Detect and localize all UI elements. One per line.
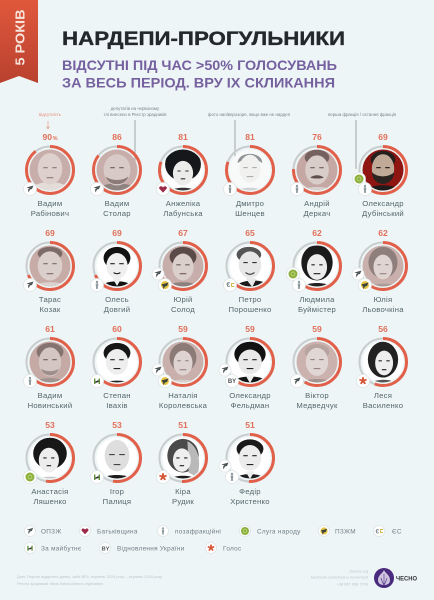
deputy: Ігор Палиця: 53 (112, 420, 122, 430)
legend: Слуга народу: Слуга народу (257, 528, 301, 536)
deputy: Вадим Рабінович: 90% (43, 132, 58, 142)
ribbon: 5 років: 5 РОКІВ (14, 10, 28, 66)
legend: За майбутнє: За майбутнє (41, 544, 82, 552)
deputy: Степан Івахів: Івахів (106, 401, 128, 410)
annotation: red background: тлі внесено в Реєстр зрадників (104, 112, 167, 117)
deputy: Наталія Королевська (152, 324, 208, 410)
deputy: Людмила Буймістер (286, 228, 341, 314)
deputy: Леся Василенко (356, 324, 407, 410)
deputy: Олександр Дубінський (352, 132, 407, 218)
contacts: chesno.org (349, 568, 368, 574)
legend: Відновлення України: Відновлення України (117, 544, 185, 552)
legend: Батьківщина: Батьківщина (97, 528, 138, 536)
deputy: Андрій Деркач (290, 132, 341, 218)
deputy: Вадим Столар: Столар (103, 209, 131, 218)
deputy: Петро Порошенко (224, 228, 274, 314)
title: НАРДЕПИ-ПРОГУЛЬНИКИ (62, 29, 345, 50)
deputy: Леся Василенко: Василенко (363, 401, 403, 410)
annotation: factions (328, 112, 397, 169)
deputy: Вадим Рабінович (24, 132, 74, 218)
deputy: Вадим Рабінович: Вадим (38, 199, 62, 208)
deputy: Олесь Довгий: 69 (112, 228, 122, 238)
deputy: Леся Василенко: 56 (378, 324, 388, 334)
deputy: Олександр Фельдман: BY (228, 379, 236, 385)
deputy: Дмитро Шенцев: Шенцев (235, 209, 265, 218)
deputy: Вадим Новинський: Вадим (38, 391, 62, 400)
annotation: factions: перша фракція / остання фракція (328, 112, 397, 117)
deputy: Федір Христенко (219, 420, 274, 506)
legend: Відновлення України: BY (101, 546, 110, 552)
legend: ПЗЖМ: ПЗЖМ (335, 528, 356, 536)
deputy: Вадим Новинський: Новинський (28, 401, 72, 410)
deputy: Людмила Буймістер: 62 (312, 228, 322, 238)
deputy: Федір Христенко: Федір (239, 487, 261, 496)
deputy: Дмитро Шенцев: Дмитро (236, 199, 264, 208)
deputy: Юрій Солод: Юрій (173, 295, 193, 304)
deputy: Олександр Фельдман (219, 324, 274, 410)
deputy: Юлія Льовочкіна: Юлія (374, 295, 392, 304)
deputy: Анастасія Ляшенко: 53 (45, 420, 55, 430)
deputy: Кіра Рудик: Рудик (172, 497, 194, 506)
deputy: Анжеліка Лабунська: Анжеліка (166, 199, 201, 208)
deputy: Вадим Рабінович: Рабінович (31, 209, 69, 218)
deputy: Юлія Льовочкіна: Льовочкіна (362, 305, 404, 314)
legend: позафракційні: позафракційні (175, 528, 221, 536)
deputy: Юрій Солод (152, 228, 207, 314)
subtitle: ВІДСУТНІ ПІД ЧАС >50% ГОЛОСУВАНЬ (62, 57, 337, 73)
deputy: Олесь Довгий: Довгий (104, 305, 130, 314)
annotation: absence (39, 112, 62, 129)
deputy: Вадим Новинський: 61 (45, 324, 55, 334)
deputy: Петро Порошенко: Петро (239, 295, 261, 304)
deputy: Олександр Фельдман: Олександр (229, 391, 271, 400)
annotation: red background (104, 106, 167, 169)
deputy: Юлія Льовочкіна (352, 228, 407, 314)
deputy: Тарас Козак: 69 (45, 228, 55, 238)
deputy: Людмила Буймістер: Людмила (299, 295, 335, 304)
source note: Дані: Портал відкритих даних, сайт ВРУ, серпень 2019 року – серпень 2024 року (17, 574, 162, 579)
deputy: Андрій Деркач: 76 (312, 132, 322, 142)
deputy: Кіра Рудик: 51 (178, 420, 188, 430)
annotation: absence: відсутність (39, 112, 62, 117)
deputy: Петро Порошенко: 65 (245, 228, 255, 238)
deputy: Кіра Рудик: Кіра (175, 487, 191, 496)
annotation: translucent photo (208, 112, 291, 169)
deputy: Олександр Фельдман: 59 (245, 324, 255, 334)
deputy: Тарас Козак: Козак (39, 305, 61, 314)
deputy: Ігор Палиця: Ігор (110, 487, 124, 496)
deputy: Анастасія Ляшенко: Ляшенко (33, 497, 67, 506)
deputy: Юлія Льовочкіна: 62 (378, 228, 388, 238)
legend: Голос: Голос (223, 546, 242, 552)
contacts (311, 568, 369, 586)
deputy: Вадим Столар: 86 (112, 132, 122, 142)
deputy: Олександр Фельдман: Фельдман (231, 401, 269, 410)
deputy: Ігор Палиця (90, 420, 141, 506)
subtitle (62, 57, 337, 90)
contacts: +38 067 938 7799 (337, 582, 368, 586)
deputy: Анастасія Ляшенко: Анастасія (31, 487, 69, 496)
deputy: Степан Івахів: Степан (103, 391, 131, 400)
deputy: Юрій Солод: 67 (178, 228, 188, 238)
deputy: Олександр Дубінський: Дубінський (362, 209, 404, 218)
deputy: Анжеліка Лабунська (156, 132, 207, 218)
legend: Голос (206, 542, 242, 554)
legend: ПЗЖМ (318, 526, 356, 536)
deputy: Віктор Медведчук: Медведчук (296, 401, 338, 410)
legend: ЄС: € (376, 528, 380, 536)
deputy: Юрій Солод: Солод (171, 305, 195, 314)
deputy: Степан Івахів: 60 (112, 324, 122, 334)
deputy: Олександр Дубінський: 69 (378, 132, 388, 142)
deputy: Анжеліка Лабунська: 81 (178, 132, 188, 142)
deputy: Анастасія Ляшенко (24, 420, 74, 506)
deputy: Дмитро Шенцев (224, 132, 274, 218)
deputy: Олесь Довгий (90, 228, 141, 314)
deputy: Федір Христенко: Христенко (230, 497, 270, 506)
deputy: Петро Порошенко: € (226, 282, 230, 289)
contacts: facebook.com/chesno.movement (311, 574, 369, 580)
deputy: Віктор Медведчук: Віктор (305, 391, 329, 400)
deputy: Петро Порошенко: Порошенко (228, 305, 272, 314)
deputy: Вадим Новинський (24, 324, 74, 410)
deputy: Людмила Буймістер: Буймістер (298, 305, 336, 314)
deputy: Олександр Дубінський: Олександр (362, 199, 404, 208)
legend: Батьківщина (80, 526, 138, 536)
source note: Реєстр зрадників: https://www.chesno.org/traitors (17, 581, 103, 586)
deputy: Тарас Козак: Тарас (39, 295, 61, 304)
deputy: Наталія Королевська: 59 (178, 324, 188, 334)
deputy: Ігор Палиця: Палиця (103, 497, 131, 506)
deputy: Степан Івахів (90, 324, 141, 410)
deputy: Наталія Королевська: Королевська (159, 401, 208, 410)
source note (17, 574, 162, 586)
legend: ОПЗЖ (24, 526, 62, 536)
deputy: Тарас Козак (24, 228, 74, 314)
legend: ЄС (374, 526, 402, 536)
logo: Чесно (374, 568, 417, 588)
legend: ОПЗЖ: ОПЗЖ (41, 528, 62, 536)
ribbon: 5 років (0, 0, 38, 83)
subtitle: ЗА ВЕСЬ ПЕРІОД. ВРУ ІХ СКЛИКАННЯ (62, 74, 335, 90)
legend: позафракційні (158, 526, 221, 536)
legend: Відновлення України (100, 542, 185, 554)
deputy: Вадим Столар (90, 132, 141, 218)
deputy: Дмитро Шенцев: 81 (245, 132, 255, 142)
legend: Слуга народу (240, 526, 301, 536)
annotation: red background: депутатів на червоному (111, 106, 160, 111)
deputy: Леся Василенко: Леся (374, 391, 392, 400)
annotation: translucent photo: фото напівпрозоре, якщо вже не нардеп (208, 112, 291, 117)
legend: ЄС: ЄС (392, 528, 402, 536)
deputy: Віктор Медведчук (290, 324, 341, 410)
deputy: Наталія Королевська: Наталія (168, 391, 198, 400)
deputy: Вадим Столар: Вадим (105, 199, 129, 208)
deputy: Анжеліка Лабунська: Лабунська (163, 209, 203, 218)
legend: За майбутнє (24, 542, 82, 554)
deputy: Андрій Деркач: Деркач (304, 209, 330, 218)
legend (24, 526, 402, 554)
logo: Чесно: ЧЕСНО (396, 575, 417, 582)
deputy: Федір Христенко: 51 (245, 420, 255, 430)
deputy: Андрій Деркач: Андрій (304, 199, 330, 208)
deputy: Олесь Довгий: Олесь (105, 295, 129, 304)
deputy: Віктор Медведчук: 59 (312, 324, 322, 334)
deputy: Кіра Рудик (156, 420, 207, 506)
